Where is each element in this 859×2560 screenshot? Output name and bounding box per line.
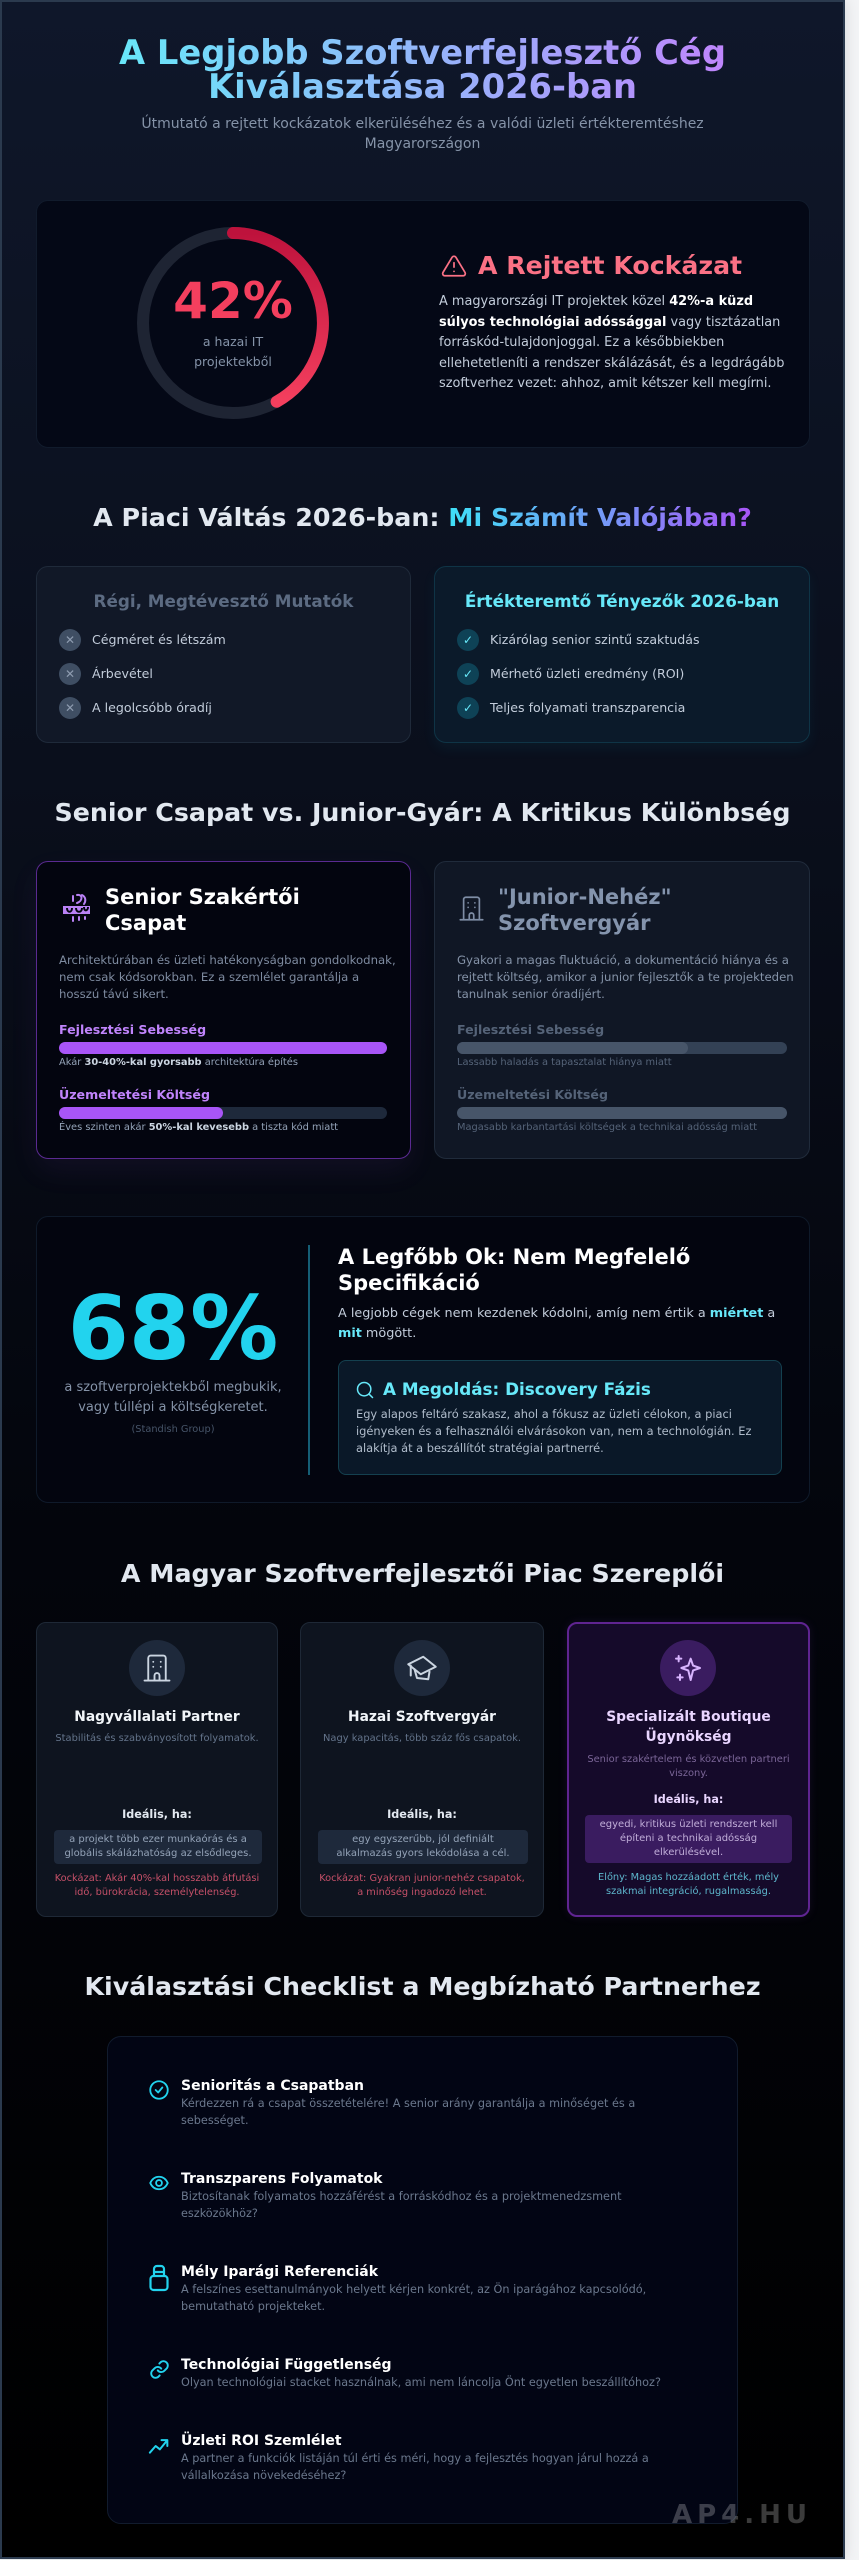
text: risk: Kockázat: Akár 40%-kal hosszabb átfutási	[55, 1873, 259, 1884]
text: tech independence: Olyan technológiai stacket használnak, ami nem láncolja Önt egyetlen beszállítóhoz?	[181, 2376, 661, 2389]
box: ideal use: alkalmazás gyors lekódolása a cél.	[336, 1848, 510, 1859]
panel: junior factory	[434, 861, 810, 1159]
heading: boutique agency	[606, 1709, 771, 1745]
item: transparency	[457, 697, 685, 719]
callout: discovery phase	[338, 1360, 782, 1475]
item: company size: Cégméret és létszám	[92, 632, 226, 647]
item: transparency: Teljes folyamati transzparencia	[490, 700, 685, 715]
stat caption: a szoftverprojektekből megbukik,	[64, 1380, 282, 1395]
stat caption: projektekből	[194, 354, 272, 369]
text: junior factory description	[457, 953, 794, 1001]
box: ideal use	[54, 1830, 262, 1864]
icon: search	[356, 1382, 374, 1398]
item: senior expertise: ✓	[463, 633, 473, 647]
text: tech independence	[181, 2356, 661, 2391]
text: root cause: mit mögött.	[338, 1326, 416, 1341]
icon: trending up	[149, 2436, 169, 2456]
text: root cause: A legjobb cégek nem kezdenek kódolni, amíg nem értik a miértet a	[338, 1306, 775, 1321]
item: seniority	[149, 2078, 635, 2127]
box: ideal use: globális skálázhatóság az elsődleges.	[64, 1848, 252, 1859]
text: boutique subtitle: viszony.	[669, 1768, 708, 1779]
item: ROI: Mérhető üzleti eredmény (ROI)	[490, 666, 684, 681]
text: junior factory description: tanulnak senior óradíjért.	[457, 987, 605, 1001]
icon: link	[149, 2359, 170, 2380]
label: ideal if: Ideális, ha:	[387, 1808, 457, 1821]
item: ROI: ✓	[463, 667, 473, 681]
bar: operating cost 50%	[59, 1107, 387, 1119]
box: ideal use: egyedi, kritikus üzleti rendszert kell	[600, 1819, 777, 1830]
text: enterprise subtitle: Stabilitás és szabványosított folyamatok.	[55, 1733, 259, 1744]
icon: sparkles	[660, 1640, 716, 1696]
text: risk: a minőség ingadozó lehet.	[357, 1887, 487, 1898]
text: senior team description	[59, 953, 396, 1001]
box: ideal use: egy egyszerűbb, jól definiált	[352, 1834, 494, 1845]
source note: (Standish Group)	[131, 1424, 215, 1435]
caption: operating cost: Magasabb karbantartási költségek a technikai adósság miatt	[457, 1122, 757, 1133]
text: boutique subtitle	[587, 1754, 790, 1779]
heading: old metrics: Régi, Megtévesztő Mutatók	[94, 591, 353, 611]
item: industry references	[149, 2264, 646, 2313]
icon: graduation cap	[394, 1640, 450, 1696]
heading: market players: A Magyar Szoftverfejlesztői Piac Szereplői	[121, 1559, 724, 1588]
icon: eye	[149, 2176, 169, 2190]
text: business ROI	[181, 2432, 649, 2484]
text: hidden risk body: szoftverhez vezet: ahhoz, amit kétszer kell megírni.	[439, 376, 772, 391]
text: discovery phase	[356, 1407, 751, 1455]
panel: senior team	[36, 861, 411, 1159]
stat 68%: 68%	[68, 1277, 278, 1380]
heading: junior factory: "Junior-Nehéz"	[498, 885, 672, 909]
text: business ROI: Üzleti ROI Szemlélet	[181, 2433, 342, 2449]
text: transparent processes: Transzparens Folyamatok	[181, 2171, 382, 2187]
caption: operating cost: Éves szinten akár 50%-kal kevesebb a tiszta kód miatt	[59, 1122, 338, 1133]
text: risk	[319, 1873, 525, 1898]
text: industry references: A felszínes esettanulmányok helyett kérjen konkrét, az Ön iparágához kapcsolódó,	[181, 2283, 646, 2296]
label: operating cost: Üzemeltetési Költség	[59, 1087, 210, 1102]
bar: operating cost 100%	[457, 1107, 787, 1119]
item: ROI	[457, 663, 684, 685]
item: company size: ✕	[65, 633, 75, 647]
text: factory subtitle: Nagy kapacitás, több száz fős csapatok.	[323, 1733, 521, 1744]
text: discovery phase: igényeken és a felhasználói elvárásokon van, nem a technológián. Ez	[356, 1424, 751, 1438]
panel: old metrics	[36, 566, 411, 743]
item: transparent processes	[149, 2171, 622, 2220]
text: senior team description: hosszú távú sikert.	[59, 987, 169, 1001]
text: hidden risk body: ellehetetleníti a rendszer skálázását, és a legdrágább	[439, 356, 784, 371]
text: risk: Kockázat: Gyakran junior-nehéz csapatok,	[319, 1873, 525, 1884]
panel: root cause	[36, 1216, 810, 1503]
stat caption	[194, 334, 272, 369]
box: ideal use	[585, 1815, 792, 1863]
heading: junior factory	[498, 885, 672, 935]
heading: market shift: A Piaci Váltás 2026-ban: Mi Számít Valójában?	[93, 503, 752, 532]
heading: senior team: Csapat	[105, 911, 186, 935]
text: hidden risk body	[439, 294, 784, 391]
heading: checklist: Kiválasztási Checklist a Megbízható Partnerhez	[84, 1972, 761, 2001]
panel: hidden risk	[36, 200, 810, 448]
title: A Legjobb Szoftverfejlesztő Cég	[119, 33, 726, 72]
stat caption: vagy túllépi a költségkeretet.	[78, 1400, 268, 1415]
icon: brain circuit	[63, 894, 90, 922]
item: cheapest rate: ✕	[65, 701, 75, 715]
heading: boutique agency: Ügynökség	[646, 1729, 732, 1745]
subtitle	[141, 114, 704, 152]
panel: value factors	[434, 566, 810, 743]
text: hidden risk body: A magyarországi IT projektek közel 42%-a küzd	[439, 294, 753, 309]
text: senior team description: Architektúrában és üzleti hatékonyságban gondolkodnak,	[59, 953, 396, 967]
text: transparent processes: eszközökhöz?	[181, 2207, 258, 2220]
text: root cause	[338, 1306, 775, 1341]
heading: enterprise partner: Nagyvállalati Partner	[74, 1709, 240, 1725]
text: senior team description: nem csak kódsorokban. Ez a szemlélet garantálja a	[59, 970, 359, 984]
card: local software factory	[300, 1622, 544, 1917]
title	[110, 36, 735, 104]
heading: hidden risk: A Rejtett Kockázat	[478, 251, 742, 280]
heading: discovery phase: A Megoldás: Discovery Fázis	[383, 1379, 651, 1399]
heading: senior vs junior: Senior Csapat vs. Junior-Gyár: A Kritikus Különbség	[55, 798, 790, 827]
stat caption: a hazai IT	[203, 334, 263, 349]
text: junior factory description: Gyakori a magas fluktuáció, a dokumentáció hiánya és a	[457, 953, 789, 967]
caption: dev speed: Akár 30-40%-kal gyorsabb architektúra építés	[59, 1057, 298, 1068]
label: ideal if: Ideális, ha:	[122, 1808, 192, 1821]
box: ideal use: elkerülésével.	[654, 1847, 723, 1858]
text: boutique subtitle: Senior szakértelem és közvetlen partneri	[587, 1754, 790, 1765]
text: hidden risk body: súlyos technológiai adóssággal vagy tisztázatlan	[439, 315, 780, 330]
item: senior expertise: Kizárólag senior szintű szaktudás	[490, 632, 700, 647]
text: seniority: sebességet.	[181, 2114, 249, 2127]
heading: root cause: Specifikáció	[338, 1271, 480, 1295]
bar: dev speed 100%	[59, 1042, 387, 1054]
text: industry references: bemutatható projekteket.	[181, 2300, 325, 2313]
label: operating cost: Üzemeltetési Költség	[457, 1087, 608, 1102]
panel: checklist	[107, 2036, 738, 2524]
text: risk: idő, bürokrácia, személytelenség.	[74, 1887, 240, 1898]
title: Kiválasztása 2026-ban	[208, 67, 637, 106]
label: dev speed: Fejlesztési Sebesség	[59, 1022, 206, 1037]
item: company size	[59, 629, 226, 651]
text: business ROI: A partner a funkciók listáján túl érti és méri, hogy a fejlesztés hogyan járul hozzá a	[181, 2452, 649, 2465]
text: advantage	[598, 1872, 779, 1897]
divider line	[308, 1245, 310, 1475]
item: revenue: ✕	[65, 667, 75, 681]
heading: senior team: Senior Szakértői	[105, 885, 300, 909]
text: tech independence: Technológiai Függetlenség	[181, 2357, 392, 2373]
icon: warning	[442, 255, 466, 277]
text: advantage: szakmai integráció, rugalmasság.	[606, 1886, 771, 1897]
heading: local software factory: Hazai Szoftvergyár	[348, 1709, 496, 1725]
box: ideal use: építeni a technikai adósság	[620, 1833, 757, 1844]
box: ideal use	[318, 1830, 528, 1864]
text: junior factory description: rejtett költség, amikor a junior fejlesztők a te projekteden	[457, 970, 794, 984]
heading: value factors: Értékteremtő Tényezők 2026-ban	[465, 591, 779, 611]
text: business ROI: vállalkozása növekedéséhez?	[181, 2469, 346, 2482]
bar: dev speed 70%	[457, 1042, 787, 1054]
label: ideal if: Ideális, ha:	[654, 1793, 723, 1806]
card: enterprise partner	[36, 1622, 278, 1917]
text: risk	[55, 1873, 259, 1898]
item: cheapest rate	[59, 697, 212, 719]
text: transparent processes: Biztosítanak folyamatos hozzáférést a forráskódhoz és a projektmenedzsment	[181, 2190, 622, 2203]
text: seniority: Senioritás a Csapatban	[181, 2078, 364, 2094]
item: transparency: ✓	[463, 701, 473, 715]
box: ideal use: a projekt több ezer munkaórás és a	[69, 1834, 247, 1845]
heading: boutique agency: Specializált Boutique	[606, 1709, 771, 1725]
text: industry references	[181, 2264, 646, 2313]
heading: junior factory: Szoftvergyár	[498, 911, 650, 935]
subtitle: Útmutató a rejtett kockázatok elkerüléséhez és a valódi üzleti értékteremtéshez	[141, 116, 704, 132]
item: revenue	[59, 663, 153, 685]
text: seniority: Kérdezzen rá a csapat összetételére! A senior arány garantálja a minőséget és a	[181, 2097, 635, 2110]
text: discovery phase: Egy alapos feltáró szakasz, ahol a fókusz az üzleti célokon, a piaci	[356, 1407, 732, 1421]
icon: building	[459, 896, 484, 921]
icon: check circle	[149, 2080, 169, 2100]
text: industry references: Mély Iparági Referenciák	[181, 2264, 378, 2280]
item: tech independence	[150, 2357, 661, 2389]
text: hidden risk body: forráskód-tulajdonjoggal. Ez a későbbiekben	[439, 335, 724, 350]
item: senior expertise	[457, 629, 700, 651]
heading: senior team	[105, 885, 300, 935]
text: seniority	[181, 2078, 635, 2127]
heading: root cause	[338, 1245, 690, 1295]
text: transparent processes	[181, 2171, 622, 2220]
caption: dev speed: Lassabb haladás a tapasztalat hiánya miatt	[457, 1057, 672, 1068]
donut chart 42%	[137, 227, 329, 419]
item: business ROI	[149, 2432, 709, 2496]
label: dev speed: Fejlesztési Sebesség	[457, 1022, 604, 1037]
subtitle: Magyarországon	[365, 136, 480, 152]
card: boutique agency	[567, 1622, 810, 1917]
heading: root cause: A Legfőbb Ok: Nem Megfelelő	[338, 1245, 690, 1269]
stat caption	[64, 1380, 282, 1415]
watermark: AP4.HU	[672, 2500, 812, 2530]
stat 42%: 42%	[173, 272, 293, 330]
item: revenue: Árbevétel	[92, 666, 153, 681]
icon: case	[149, 2264, 169, 2292]
text: advantage: Előny: Magas hozzáadott érték, mély	[598, 1872, 779, 1883]
icon: building	[129, 1640, 185, 1696]
item: cheapest rate: A legolcsóbb óradíj	[92, 700, 212, 715]
text: discovery phase: alakítja át a beszállítót stratégiai partnerré.	[356, 1441, 604, 1455]
